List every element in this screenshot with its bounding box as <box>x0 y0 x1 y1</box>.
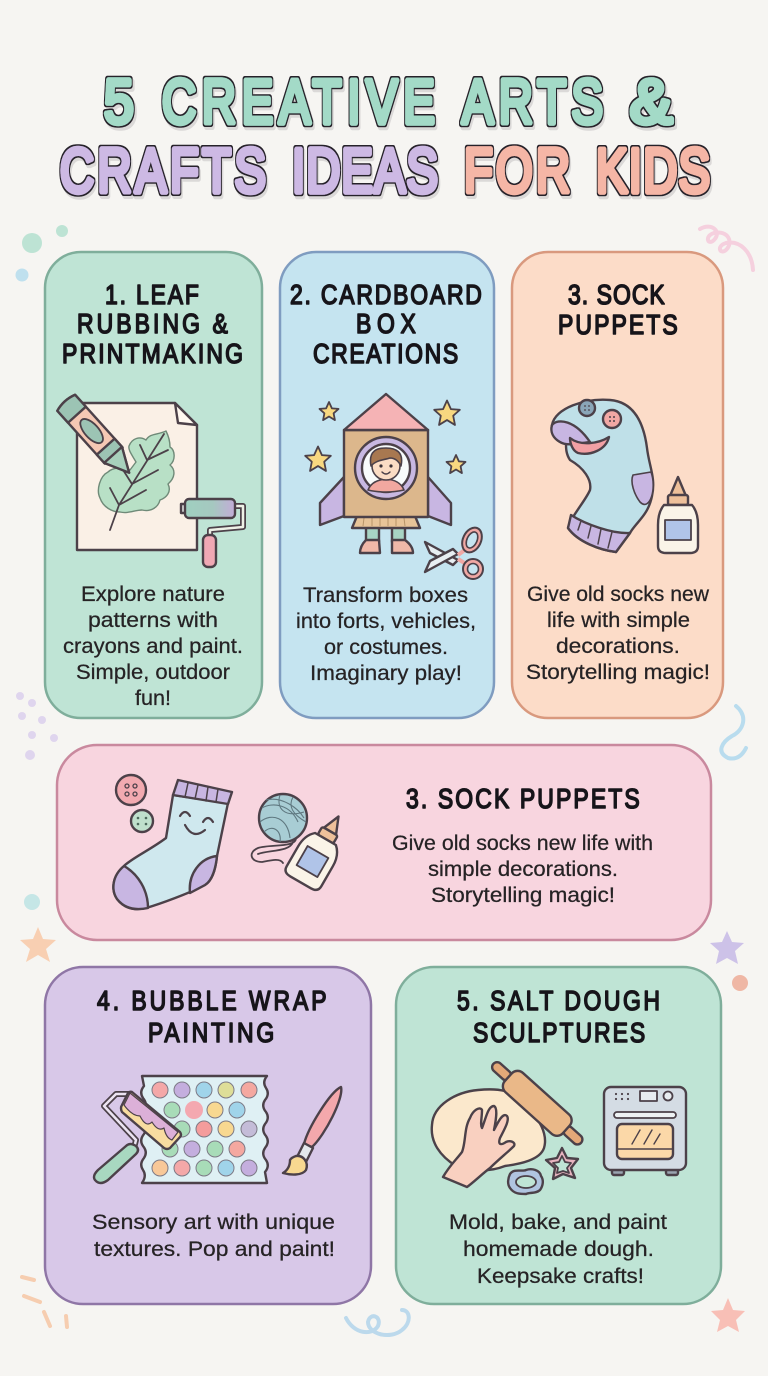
heading: sock puppets: PUPPETS <box>558 310 678 341</box>
title: CRAFTS <box>60 136 266 206</box>
heading: bubble wrap <box>97 986 327 1049</box>
illustration: crayon, leaf print and paint roller <box>56 393 243 567</box>
decorative confetti <box>16 225 753 1335</box>
illustration: sock puppet and glue <box>551 400 698 553</box>
panel: bubble wrap painting <box>45 967 371 1304</box>
title: KIDS <box>596 136 710 206</box>
description: salt dough: homemade dough. <box>463 1238 654 1261</box>
description: cardboard box: Transform boxes <box>303 584 468 607</box>
description: leaf rubbing: patterns with <box>88 609 218 632</box>
description: leaf rubbing: Explore nature <box>81 583 225 606</box>
description: salt dough: Keepsake crafts! <box>477 1265 644 1288</box>
description: leaf rubbing: Simple, outdoor <box>76 661 230 684</box>
description: sock puppets: Storytelling magic! <box>526 661 710 684</box>
panel: cardboard box creations <box>280 252 494 718</box>
heading: cardboard box: CREATIONS <box>313 339 458 370</box>
description: cardboard box: into forts, vehicles, <box>296 610 476 633</box>
title: FOR <box>464 136 570 206</box>
heading: salt dough <box>457 986 660 1049</box>
title: CREATIVE <box>162 67 435 137</box>
description: cardboard box: Imaginary play! <box>310 662 462 685</box>
title: ARTS <box>462 67 603 137</box>
description: sock puppets <box>526 583 710 684</box>
description: bubble wrap: textures. Pop and paint! <box>94 1238 335 1261</box>
description: leaf rubbing: crayons and paint. <box>63 635 243 658</box>
description: salt dough: Mold, bake, and paint <box>449 1211 667 1234</box>
heading: leaf rubbing: 1. LEAF <box>105 280 199 311</box>
heading: salt dough: SCULPTURES <box>473 1018 645 1049</box>
description: sock puppets: decorations. <box>556 635 680 658</box>
heading: leaf rubbing: RUBBING & <box>77 309 228 340</box>
description: sock puppets: life with simple <box>547 609 690 632</box>
illustration: cardboard rocket with child and scissors <box>305 394 486 579</box>
description: bubble wrap: Sensory art with unique <box>92 1211 335 1234</box>
panel: sock puppets <box>512 252 723 718</box>
description: sock puppets wide: Storytelling magic! <box>431 884 615 907</box>
heading: sock puppets <box>558 280 678 341</box>
description: leaf rubbing <box>63 583 243 710</box>
illustration: sock, buttons, yarn and glue <box>113 775 356 909</box>
heading: cardboard box <box>290 280 482 370</box>
description: cardboard box <box>296 584 476 685</box>
title: IDEAS <box>292 136 438 206</box>
heading: sock puppets: 3. SOCK <box>568 280 665 311</box>
panel: sock puppets wide <box>57 745 711 940</box>
description: cardboard box: or costumes. <box>324 636 448 659</box>
description: leaf rubbing: fun! <box>135 687 171 710</box>
heading: cardboard box: BOX <box>356 309 416 340</box>
description: bubble wrap <box>92 1211 335 1261</box>
illustration: dough, rolling pin, cutters and oven <box>432 1054 686 1194</box>
heading: sock puppets wide: 3. SOCK PUPPETS <box>406 784 640 815</box>
title: 5 <box>104 68 134 137</box>
heading: salt dough: 5. SALT DOUGH <box>457 986 660 1017</box>
description: sock puppets wide: Give old socks new life with <box>392 832 653 855</box>
description: sock puppets: Give old socks new <box>527 583 710 606</box>
illustration: bubble wrap, roller and brush <box>94 1076 341 1183</box>
title <box>60 67 710 206</box>
heading: bubble wrap: 4. BUBBLE WRAP <box>97 986 327 1017</box>
heading: bubble wrap: PAINTING <box>148 1018 274 1049</box>
heading: cardboard box: 2. CARDBOARD <box>290 280 482 311</box>
heading: leaf rubbing: PRINTMAKING <box>62 339 243 370</box>
description: sock puppets wide <box>392 832 653 907</box>
title: & <box>630 68 672 137</box>
description: sock puppets wide: simple decorations. <box>428 858 618 881</box>
heading: leaf rubbing <box>62 280 243 370</box>
panel: leaf rubbing <box>45 252 262 718</box>
description: salt dough <box>449 1211 667 1288</box>
panel: salt dough sculptures <box>396 967 721 1304</box>
